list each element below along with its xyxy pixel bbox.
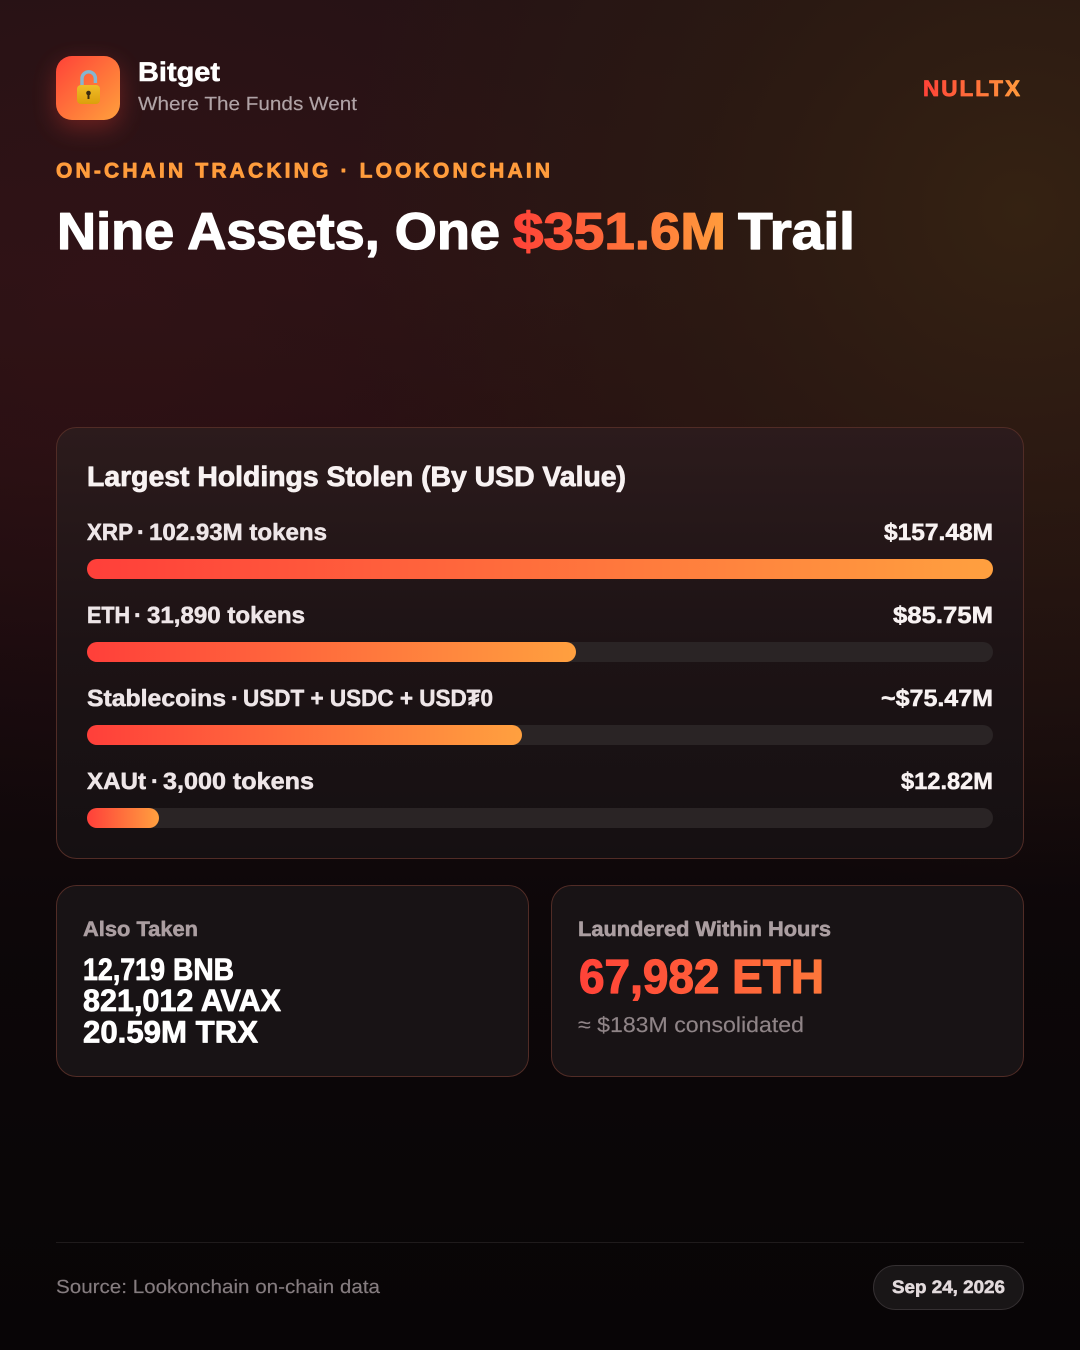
row: ETH: · — [134, 602, 142, 628]
title: Trail — [738, 203, 855, 261]
header: brand — [56, 56, 358, 128]
publisher wordmark: NULLTX — [923, 76, 1022, 101]
row: ETH: ETH — [87, 602, 130, 628]
row: XAUt — [87, 768, 993, 828]
sub note: ≈ $183M consolidated — [578, 1013, 804, 1037]
row: XRP: 102.93M tokens — [149, 519, 327, 545]
row: ETH — [87, 602, 993, 662]
title — [57, 203, 855, 261]
panel: largest holdings stolen — [56, 428, 1024, 858]
date pill — [874, 1266, 1024, 1310]
row: ETH: $85.75M — [893, 602, 993, 628]
panel heading: Largest Holdings Stolen (By USD Value) — [87, 461, 626, 492]
row: XAUt: 3,000 tokens — [163, 768, 314, 794]
panel: also taken — [56, 886, 528, 1076]
big number: 67,982 ETH — [579, 951, 824, 1004]
row: Stablecoins: USDT + USDC + USD₮0 — [243, 685, 493, 711]
title: Nine Assets, One — [57, 203, 500, 261]
title: $351.6M — [513, 203, 726, 261]
asset list: BNB — [173, 952, 234, 987]
row: XRP: XRP — [87, 519, 133, 545]
row: XRP — [87, 519, 993, 579]
date pill: Sep 24, 2026 — [892, 1277, 1005, 1297]
asset list — [83, 952, 281, 1050]
row: XAUt: $12.82M — [901, 768, 993, 794]
asset list: 821,012 AVAX — [83, 983, 281, 1018]
asset list: 20.59M TRX — [83, 1014, 258, 1050]
asset list: 12,719 — [83, 952, 165, 987]
panel: laundered within hours — [552, 886, 1024, 1076]
row: Stablecoins: ~$75.47M — [881, 685, 993, 711]
row: Stablecoins — [87, 685, 993, 745]
icon: unlocked padlock — [56, 56, 120, 128]
row: Stablecoins: Stablecoins — [87, 685, 226, 711]
brand name: Bitget — [138, 57, 220, 87]
panel label: Also Taken — [83, 918, 198, 941]
row: ETH: 31,890 tokens — [147, 602, 305, 628]
row: Stablecoins: · — [231, 685, 239, 711]
row: XAUt: XAUt — [87, 768, 146, 794]
row: XRP: $157.48M — [884, 519, 993, 545]
footer source: Source: Lookonchain on-chain data — [56, 1277, 380, 1298]
row: XRP: · — [137, 519, 145, 545]
panel label: Laundered Within Hours — [578, 918, 831, 941]
eyebrow: ON-CHAIN TRACKING · LOOKONCHAIN — [56, 160, 550, 182]
row: XAUt: · — [151, 768, 159, 794]
brand tagline: Where The Funds Went — [138, 94, 358, 115]
